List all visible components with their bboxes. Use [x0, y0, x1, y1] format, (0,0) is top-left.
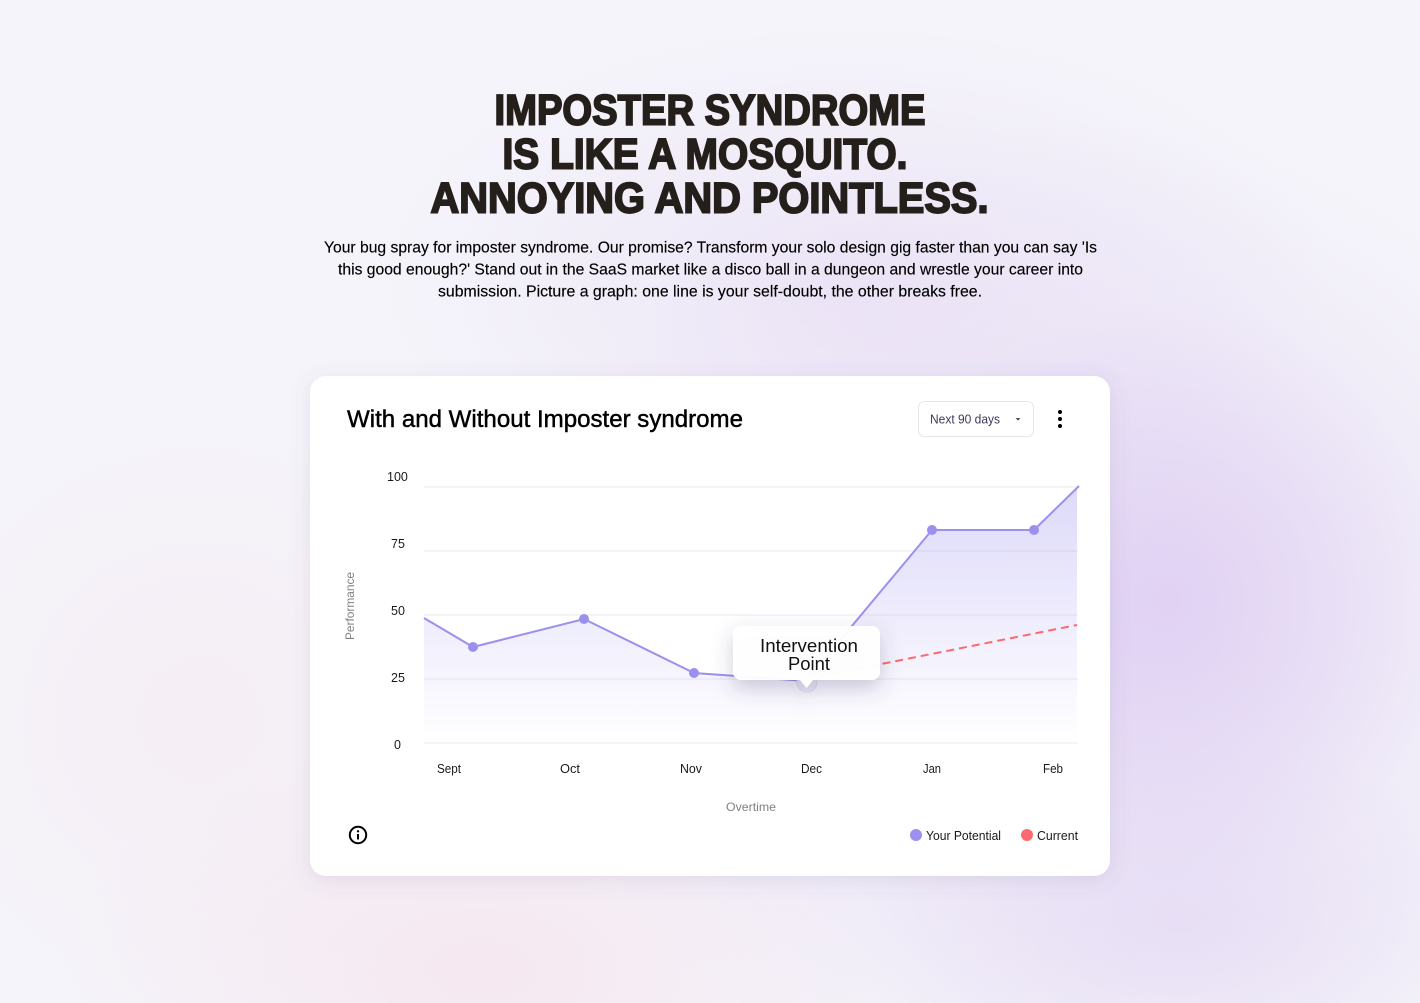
y axis labels: 50	[391, 604, 405, 618]
title: IMPOSTER SYNDROME	[494, 86, 926, 134]
title	[430, 86, 988, 222]
legend: your potential: Your Potential	[926, 829, 1001, 843]
x axis title: Overtime	[726, 800, 776, 814]
area: your potential	[424, 487, 1077, 743]
icon: info	[350, 827, 366, 843]
tooltip: intervention point: Intervention	[760, 635, 858, 656]
tooltip: intervention point: Point	[788, 653, 830, 674]
y axis labels: 75	[391, 537, 405, 551]
card heading: With and Without Imposter syndrome	[347, 406, 743, 433]
tooltip: intervention point	[733, 626, 880, 688]
intro paragraph: Your bug spray for imposter syndrome. Our promise? Transform your solo design gig faster than you can say 'Is	[324, 240, 1097, 256]
icon: more menu	[1058, 410, 1062, 428]
x axis labels: Oct	[560, 762, 581, 776]
intro paragraph: submission. Picture a graph: one line is your self-doubt, the other breaks free.	[438, 284, 982, 300]
panel: chart card	[310, 376, 1110, 876]
title: IS LIKE A MOSQUITO.	[502, 130, 908, 178]
legend	[910, 829, 1079, 843]
intervention marker	[797, 672, 817, 692]
x axis labels: Jan	[923, 762, 941, 776]
data points	[468, 525, 1039, 678]
dropdown: next 90 days	[918, 402, 1034, 436]
card background	[310, 376, 1110, 876]
dropdown: next 90 days: Next 90 days	[930, 412, 1000, 426]
legend: current: Current	[1037, 829, 1079, 843]
y axis labels	[387, 470, 408, 752]
line: current	[806, 625, 1077, 679]
x axis labels: Sept	[437, 762, 461, 776]
y axis labels: 100	[387, 470, 408, 484]
y axis labels: 25	[391, 671, 405, 685]
x axis labels	[437, 762, 1063, 776]
x axis labels: Nov	[680, 762, 703, 776]
intro paragraph: this good enough?' Stand out in the SaaS market like a disco ball in a dungeon and wrestle your career into	[338, 262, 1083, 278]
title: ANNOYING AND POINTLESS.	[430, 174, 988, 222]
intro paragraph	[324, 240, 1097, 300]
line: your potential	[424, 486, 1079, 681]
x axis labels: Dec	[801, 762, 822, 776]
line chart	[424, 486, 1079, 743]
x axis labels: Feb	[1043, 762, 1063, 776]
y axis labels: 0	[394, 738, 401, 752]
y axis title: Performance	[343, 572, 357, 640]
